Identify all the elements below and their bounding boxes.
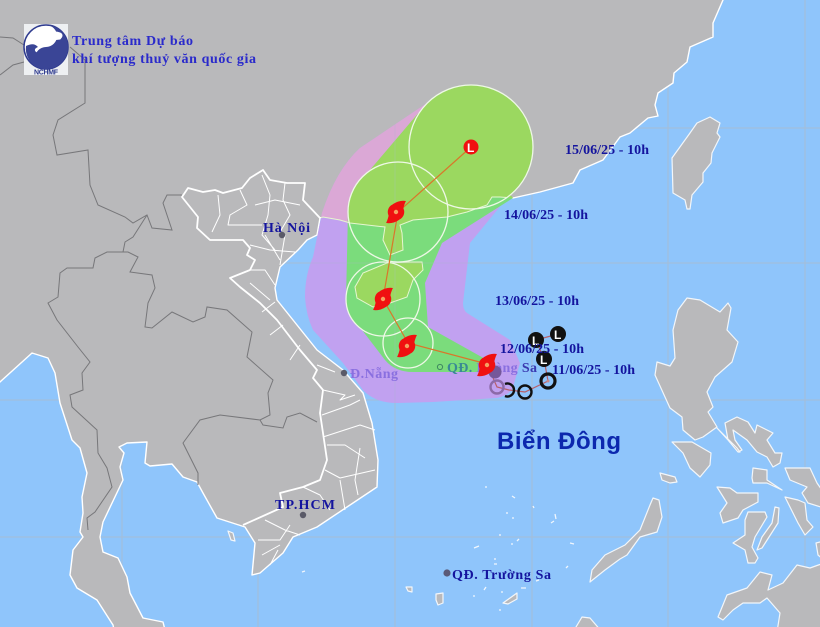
logo NCHMF: NCHMF xyxy=(34,70,59,76)
Vietnam outline and provinces xyxy=(182,170,375,565)
national borders xyxy=(0,37,317,530)
low pressure icon: 15/06 xyxy=(464,140,478,155)
storm icon: 12/06 xyxy=(397,335,417,357)
past low pressure markers: L xyxy=(540,353,547,367)
marker: Hoang Sa xyxy=(437,364,443,370)
storm icon: 13/06 xyxy=(373,288,393,310)
grid visible through cone xyxy=(310,124,468,403)
past low pressure markers: L xyxy=(532,334,539,348)
date label 12/06: 12/06/25 - 10h xyxy=(500,342,584,357)
date label 15/06: 15/06/25 - 10h xyxy=(565,143,649,158)
date label 11/06: 11/06/25 - 10h xyxy=(552,363,635,378)
storm icon: current position xyxy=(477,354,497,376)
city: TP.HCM: TP.HCM xyxy=(275,498,335,513)
label: Quan dao Hoang Sa: QĐ. Hoàng Sa xyxy=(447,361,537,376)
agency name line 2: khí tượng thuỷ văn quốc gia xyxy=(72,52,256,67)
Taiwan and Philippines islands xyxy=(228,117,820,627)
city: Da Nang: Đ.Nẵng xyxy=(350,366,398,382)
forecast track line xyxy=(383,147,487,364)
date label 13/06: 13/06/25 - 10h xyxy=(495,294,579,309)
past low pressure position with ring xyxy=(541,374,555,388)
logo NCHMF xyxy=(24,24,68,76)
past track line xyxy=(487,334,558,392)
past low pressure markers xyxy=(528,326,566,367)
past positions, fading rings xyxy=(490,380,532,398)
agency name line 1: Trung tâm Dự báo xyxy=(72,34,193,49)
past low pressure markers: L xyxy=(554,328,561,342)
date label 14/06: 14/06/25 - 10h xyxy=(504,208,588,223)
dark current position marker xyxy=(488,366,502,378)
low pressure icon: 15/06: L xyxy=(467,141,474,155)
inner forecast cone over land xyxy=(348,86,532,306)
forecast uncertainty circles xyxy=(346,85,533,368)
small reef islands xyxy=(302,234,574,610)
label: Truong Sa: QĐ. Trường Sa xyxy=(452,568,551,583)
inner forecast cone over sea xyxy=(346,113,513,372)
city: Ha Noi: Hà Nội xyxy=(263,221,310,236)
outer forecast cone over sea xyxy=(305,104,520,403)
storm icon: 14/06 xyxy=(386,201,406,223)
outer forecast cone over land xyxy=(321,104,426,222)
coastline visible through cone xyxy=(318,196,506,308)
sea name: Biển Đông xyxy=(497,428,621,455)
